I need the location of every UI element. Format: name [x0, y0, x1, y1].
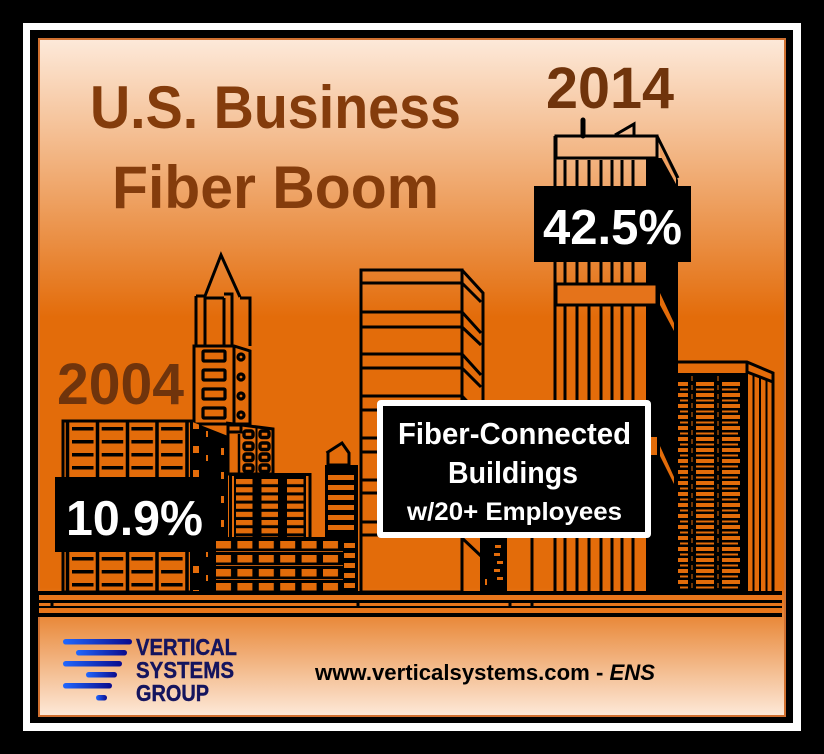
- callout: fiber-connected buildings: [380, 403, 648, 535]
- building: centre block rear: [480, 536, 507, 592]
- title: [90, 74, 461, 221]
- stat badge 42.5%: 42.5%: [543, 201, 682, 255]
- title: U.S. Business: [90, 74, 461, 141]
- building: small brick block: [226, 423, 273, 474]
- stat badge 10.9%: [55, 477, 213, 552]
- building: mid block: [230, 473, 310, 539]
- stat badge 10.9%: 10.9%: [66, 492, 203, 546]
- building: tall tower: [555, 120, 678, 592]
- building: small stepped tower: [325, 443, 358, 593]
- logo wordmark: SYSTEMS: [136, 657, 234, 683]
- stat badge 42.5%: [534, 186, 691, 262]
- logo wordmark: [136, 634, 237, 706]
- year label 2014: 2014: [546, 56, 674, 121]
- skyline illustration: [36, 120, 782, 617]
- callout: fiber-connected buildings: w/20+ Employees: [406, 498, 622, 526]
- callout: fiber-connected buildings: Fiber-Connected: [398, 416, 631, 451]
- logo icon bars: [63, 639, 132, 700]
- building: centre block: [361, 270, 532, 592]
- logo: vertical systems group: [63, 634, 237, 706]
- building: wide office block: [63, 421, 228, 592]
- building: right block: [678, 362, 773, 592]
- year label 2004: 2004: [57, 352, 184, 417]
- logo wordmark: VERTICAL: [136, 634, 237, 660]
- title: Fiber Boom: [112, 154, 439, 221]
- callout: fiber-connected buildings: Buildings: [448, 455, 578, 490]
- street ground lines: [36, 591, 782, 617]
- logo wordmark: GROUP: [136, 680, 209, 706]
- source url: www.verticalsystems.com - ENS: [314, 660, 655, 685]
- building: spire tower: [194, 255, 250, 424]
- building: low brick block: [215, 537, 343, 593]
